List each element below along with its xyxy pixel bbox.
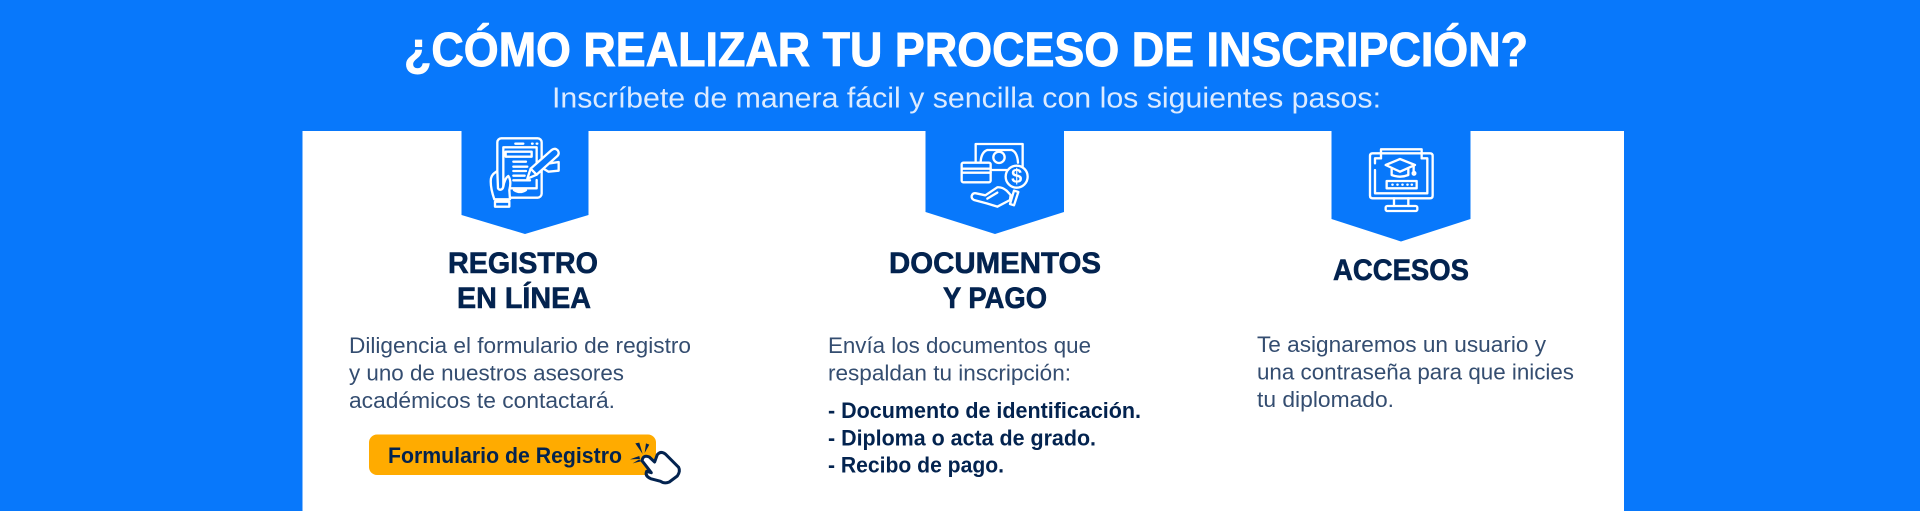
heading: documentos y pago: Y PAGO <box>943 282 1047 315</box>
heading: registro en línea: EN LÍNEA <box>457 281 591 315</box>
list: required documents <box>828 398 1141 478</box>
heading: registro en línea: REGISTRO <box>448 247 598 280</box>
text: accesos description: Te asignaremos un usuario y <box>1257 332 1546 357</box>
icon: click hand <box>630 443 679 483</box>
title: ¿CÓMO REALIZAR TU PROCESO DE INSCRIPCIÓN? <box>404 22 1528 77</box>
heading: documentos y pago <box>889 247 1101 315</box>
text: accesos description: tu diplomado. <box>1257 387 1394 412</box>
icon: monitor with graduation cap <box>1370 149 1433 211</box>
text: registro description: y uno de nuestros asesores <box>349 360 624 386</box>
button: formulario de registro: Formulario de Registro <box>388 443 622 468</box>
icon: phone form with hand and pen <box>491 138 559 207</box>
panel: documentos y pago <box>828 131 1141 478</box>
text: registro description: Diligencia el formulario de registro <box>349 333 691 358</box>
text: accesos description: una contraseña para que inicies <box>1257 360 1574 384</box>
text: registro description: académicos te contactará. <box>349 388 615 413</box>
banner: registro <box>462 131 588 234</box>
heading: documentos y pago: DOCUMENTOS <box>889 247 1101 280</box>
text: accesos description <box>1257 332 1574 412</box>
panel: registro en línea <box>349 131 691 483</box>
list: required documents: - Diploma o acta de grado. <box>828 426 1096 450</box>
white content panel <box>302 131 1624 511</box>
list: required documents: - Documento de identificación. <box>828 398 1141 423</box>
banner: documentos <box>926 131 1064 234</box>
heading: registro en línea <box>448 247 598 315</box>
subtitle: Inscríbete de manera fácil y sencilla con los siguientes pasos: <box>552 82 1381 114</box>
list: required documents: - Recibo de pago. <box>828 452 1004 478</box>
icon: money, card, coin and hand <box>962 144 1028 207</box>
text: documentos description: respaldan tu inscripción: <box>828 360 1071 386</box>
heading: accesos: ACCESOS <box>1333 254 1469 287</box>
panel: accesos <box>1257 131 1574 412</box>
text: documentos description <box>828 333 1091 386</box>
icon: dollar sign: $ <box>1011 166 1022 188</box>
banner: accesos <box>1332 131 1470 242</box>
text: documentos description: Envía los documentos que <box>828 333 1091 358</box>
text: registro description <box>349 333 691 413</box>
button: formulario de registro <box>369 434 656 475</box>
